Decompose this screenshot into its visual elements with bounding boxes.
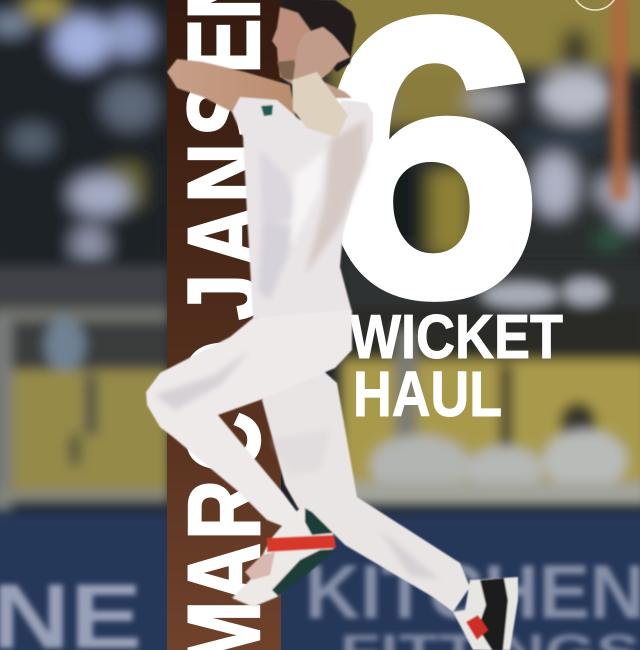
red strap bbox=[267, 535, 336, 552]
rear shoe black panel bbox=[478, 578, 508, 650]
shoe dark panel bbox=[272, 508, 335, 596]
shoe laces bbox=[245, 552, 275, 580]
trouser folds bbox=[155, 350, 440, 580]
heading: wicket haul bbox=[350, 303, 563, 430]
player bowling figure bbox=[146, 0, 518, 650]
advertising board bbox=[0, 512, 640, 650]
vertical player name: E bbox=[167, 19, 281, 74]
hair bbox=[282, 0, 356, 72]
shirt shadow folds bbox=[258, 120, 365, 300]
front leg trousers bbox=[146, 310, 352, 533]
vertical player name: O bbox=[167, 340, 281, 405]
vertical player name: J bbox=[167, 274, 281, 320]
shirt bbox=[232, 97, 373, 318]
rear leg trousers bbox=[262, 350, 470, 612]
heading: wicket haul: WICKET bbox=[350, 303, 563, 372]
beard shadow bbox=[277, 60, 300, 82]
vertical player name: A bbox=[167, 206, 281, 266]
logo circle, top right bbox=[572, 0, 618, 10]
vertical player name: N bbox=[167, 143, 281, 203]
front shoe bbox=[232, 508, 336, 607]
face and neck bbox=[272, 7, 322, 85]
raised hand and forearm bbox=[293, 27, 352, 98]
vertical player name: S bbox=[167, 81, 281, 136]
vertical player name: R bbox=[167, 480, 281, 540]
shirt badge bbox=[261, 105, 273, 116]
heading: wicket haul: HAUL bbox=[353, 358, 502, 430]
bowling arm bbox=[167, 59, 296, 120]
rear shoe red accent bbox=[466, 615, 488, 640]
arm bandage bbox=[292, 72, 348, 138]
vertical player name bbox=[167, 0, 281, 650]
brown vertical name strip bbox=[167, 0, 281, 650]
advertising board: KITCHEN bbox=[305, 550, 640, 635]
rear shoe bbox=[453, 577, 518, 650]
vertical player name: C bbox=[167, 412, 281, 472]
vertical player name: A bbox=[167, 543, 281, 603]
